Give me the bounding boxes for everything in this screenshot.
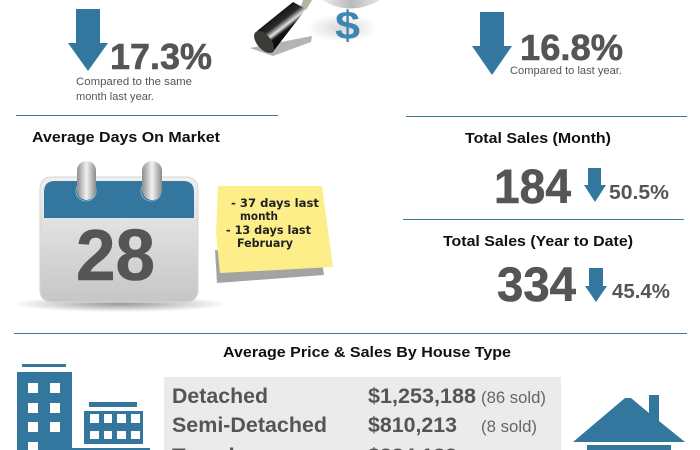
icon: calendar showing 28: [12, 161, 228, 312]
icon: down arrow: [68, 9, 108, 71]
icon: apartment buildings: [17, 364, 150, 450]
sticky note: - 13 days last: [226, 223, 311, 237]
row: semi-detached: Semi-Detached: [172, 414, 327, 437]
stat value: 17.3%: 17.3%: [110, 36, 212, 77]
value: 334: 334: [497, 259, 576, 312]
stat: 17.3% decrease: [68, 9, 212, 103]
heading: average days on market: Average Days On Market: [32, 130, 220, 146]
icon: down arrow: [585, 268, 607, 302]
icon: calendar showing 28: 28: [76, 216, 155, 296]
sticky note: - 37 days last: [231, 196, 320, 210]
heading: total sales month: Total Sales (Month): [465, 131, 611, 147]
icon: down arrow: [584, 168, 606, 202]
row: detached: [172, 385, 546, 408]
heading: total sales year to date: Total Sales (Year to Date): [443, 234, 633, 250]
heading: average price and sales by house type: Average Price & Sales By House Type: [223, 345, 511, 361]
icon: magnifying glass over dollar sign: [250, 0, 380, 56]
sticky note: [215, 186, 333, 283]
panel: total sales year to date: [443, 234, 670, 312]
stat caption: month last year.: [76, 91, 154, 103]
stat value: 16.8%: 16.8%: [520, 27, 623, 68]
value: 184: 184: [494, 161, 571, 214]
stat caption: Compared to the same: [76, 76, 192, 88]
row: townhouse: [172, 445, 546, 450]
stat: 16.8% decrease: [472, 12, 623, 77]
panel: total sales month: [465, 131, 669, 214]
change: 45.4%: 45.4%: [612, 281, 670, 303]
sticky note: month: [240, 209, 278, 223]
panel: price table: [164, 377, 561, 450]
row: detached: (86 sold): [481, 388, 546, 407]
row: detached: Detached: [172, 385, 268, 408]
icon: down arrow: [472, 12, 512, 75]
sticky note: February: [237, 236, 293, 250]
stat caption: Compared to last year.: [510, 65, 622, 77]
row: semi-detached: $810,213: [368, 414, 457, 437]
row: semi-detached: (8 sold): [481, 417, 537, 436]
row: detached: $1,253,188: [368, 385, 476, 408]
icon: magnifying glass over dollar sign: $: [335, 4, 360, 48]
row: semi-detached: [172, 414, 537, 437]
icon: house: [573, 395, 685, 450]
change: 50.5%: 50.5%: [609, 182, 669, 204]
